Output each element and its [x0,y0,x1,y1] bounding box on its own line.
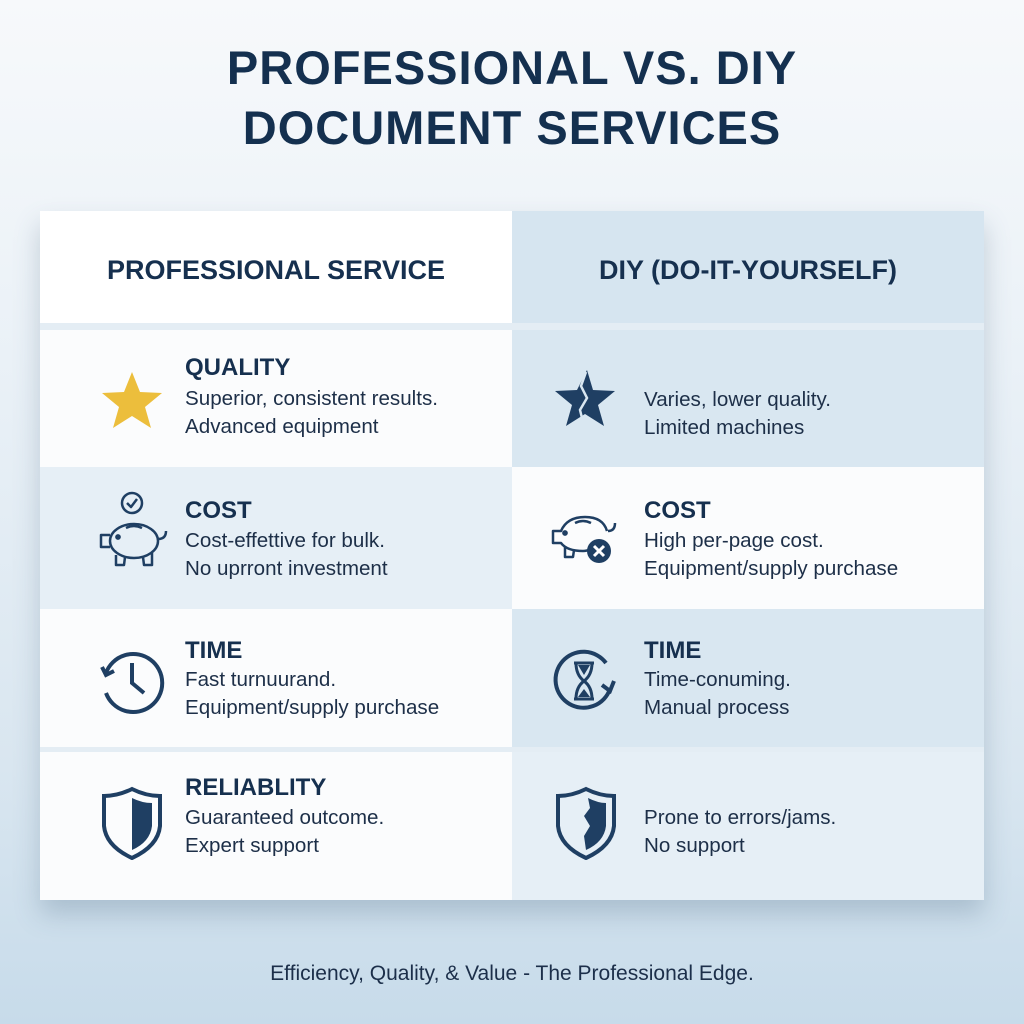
row: cost diy [512,467,984,609]
row: time diy: TIME [644,637,701,664]
row: cost diy: High per-page cost. [644,529,824,552]
row: reliability professional: Guaranteed outcome. [185,806,384,829]
header: professional [40,211,512,323]
row: reliability professional: Expert support [185,834,319,857]
icon: broken star [555,370,615,426]
row: time diy [512,609,984,747]
icon: gold star [102,372,162,428]
row: time diy: Time-conuming. [644,668,791,691]
row: time professional: Fast turnuurand. [185,668,336,691]
row: quality diy [512,330,984,467]
row: reliability professional [40,752,512,900]
row: reliability diy [512,752,984,900]
title: PROFESSIONAL VS. DIY [227,41,797,94]
row: time professional [40,609,512,747]
icon: clock [100,652,164,714]
row: quality professional: Advanced equipment [185,415,378,438]
row: cost diy: Equipment/supply purchase [644,557,898,580]
header: professional: PROFESSIONAL SERVICE [107,255,445,285]
title: DOCUMENT SERVICES [243,101,781,154]
header: diy [512,211,984,323]
row: quality diy: Varies, lower quality. [644,388,831,411]
title [227,41,797,154]
header: diy: DIY (DO-IT-YOURSELF) [599,255,897,285]
icon: shield [102,786,162,860]
row: quality diy: Limited machines [644,416,804,439]
row: reliability diy: Prone to errors/jams. [644,806,836,829]
row: reliability diy: No support [644,834,745,857]
row: quality professional: QUALITY [185,354,290,381]
row: quality professional [40,330,512,467]
row: cost professional: Cost-effettive for bulk. [185,529,385,552]
row: cost professional: COST [185,497,252,524]
row: reliability professional: RELIABLITY [185,774,326,801]
row: cost professional [40,467,512,609]
row: cost diy: COST [644,497,711,524]
icon: piggy bank x [552,516,616,563]
footer tagline: Efficiency, Quality, & Value - The Professional Edge. [270,962,754,985]
row: time professional: TIME [185,637,242,664]
icon: hourglass [554,650,616,710]
icon: cracked shield [556,786,616,860]
row: cost professional: No uprront investment [185,557,388,580]
comparison table [40,211,984,900]
row: quality professional: Superior, consistent results. [185,387,438,410]
icon: piggy bank check [100,492,168,566]
row: time professional: Equipment/supply purchase [185,696,439,719]
row: time diy: Manual process [644,696,789,719]
